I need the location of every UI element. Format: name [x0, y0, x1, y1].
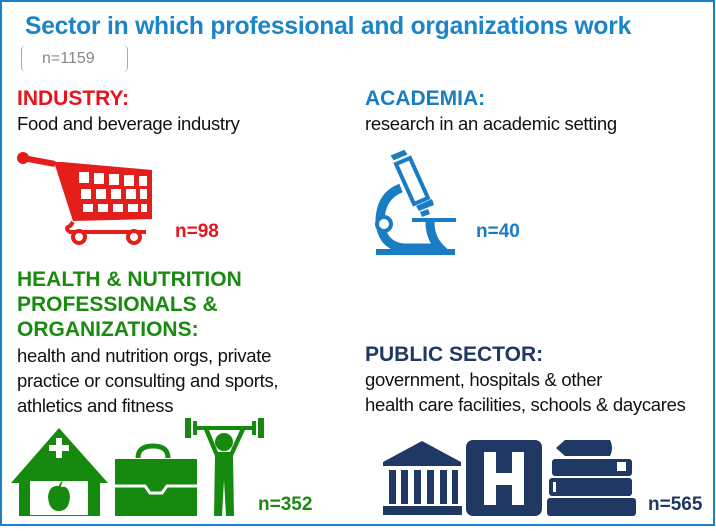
public sector text: health care facilities, schools & daycares [365, 394, 686, 415]
public sector heading: PUBLIC SECTOR: [365, 343, 543, 366]
academia text: research in an academic setting [365, 113, 617, 134]
health text: health and nutrition orgs, private [17, 345, 271, 366]
health heading: PROFESSIONALS & [17, 293, 218, 316]
health text: athletics and fitness [17, 395, 173, 416]
industry text: Food and beverage industry [17, 113, 240, 134]
health icons [11, 418, 264, 516]
health text [17, 345, 278, 416]
icon: hospital H [466, 440, 542, 516]
health count: n=352 [258, 494, 312, 515]
academia heading: ACADEMIA: [365, 87, 485, 110]
icon: shopping cart [17, 152, 152, 245]
public sector icons [383, 440, 636, 516]
icon: briefcase [115, 446, 197, 516]
industry heading: INDUSTRY: [17, 87, 129, 110]
public sector text [365, 369, 686, 415]
public sector count: n=565 [648, 494, 702, 515]
sample size box [21, 45, 128, 72]
title: Sector in which professional and organizations work [25, 13, 631, 40]
public sector text: government, hospitals & other [365, 369, 602, 390]
icon: microscope [375, 150, 456, 255]
icon: books [547, 440, 636, 516]
icon: house with apple [11, 428, 108, 516]
health heading [17, 268, 242, 341]
sample size box: n=1159 [42, 50, 95, 67]
icon: weightlifter [185, 418, 264, 516]
health heading: ORGANIZATIONS: [17, 318, 199, 341]
icon: government building [383, 441, 462, 515]
health text: practice or consulting and sports, [17, 370, 278, 391]
health heading: HEALTH & NUTRITION [17, 268, 242, 291]
academia count: n=40 [476, 221, 520, 242]
industry count: n=98 [175, 221, 219, 242]
